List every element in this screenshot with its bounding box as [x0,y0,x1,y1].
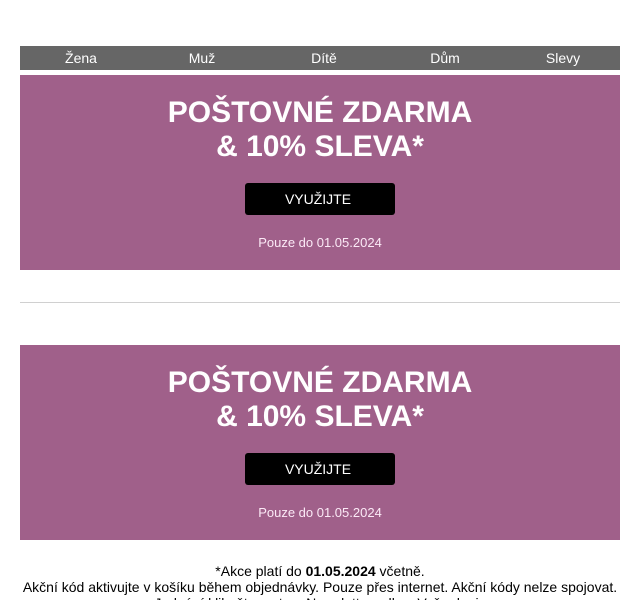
nav item: Žena: Žena [65,50,97,66]
button: VYUŽIJTE [285,461,351,477]
heading [168,95,472,163]
nav item: Slevy: Slevy [546,50,580,66]
navigation bar [20,46,620,70]
button [245,453,395,485]
heading: & 10% SLEVA* [216,130,424,163]
panel: promo banner 1 [20,75,620,270]
heading: & 10% SLEVA* [216,400,424,433]
nav item: Dům: Dům [430,50,460,66]
panel: promo banner 2 [20,345,620,540]
nav item: Muž: Muž [189,50,215,66]
footer terms text: Akční kód aktivujte v košíku během objednávky. Pouze přes internet. Akční kódy nelze spojovat. [23,579,617,595]
footer terms text [22,563,617,600]
heading: POŠTOVNÉ ZDARMA [168,96,472,129]
validity text: Pouze do 01.05.2024 [258,235,382,250]
button: VYUŽIJTE [285,191,351,207]
heading: POŠTOVNÉ ZDARMA [168,366,472,399]
footer terms text: *Akce platí do 01.05.2024 včetně. [215,563,425,579]
heading [168,365,472,433]
button [245,183,395,215]
validity text: Pouze do 01.05.2024 [258,505,382,520]
nav item: Dítě: Dítě [311,50,337,66]
